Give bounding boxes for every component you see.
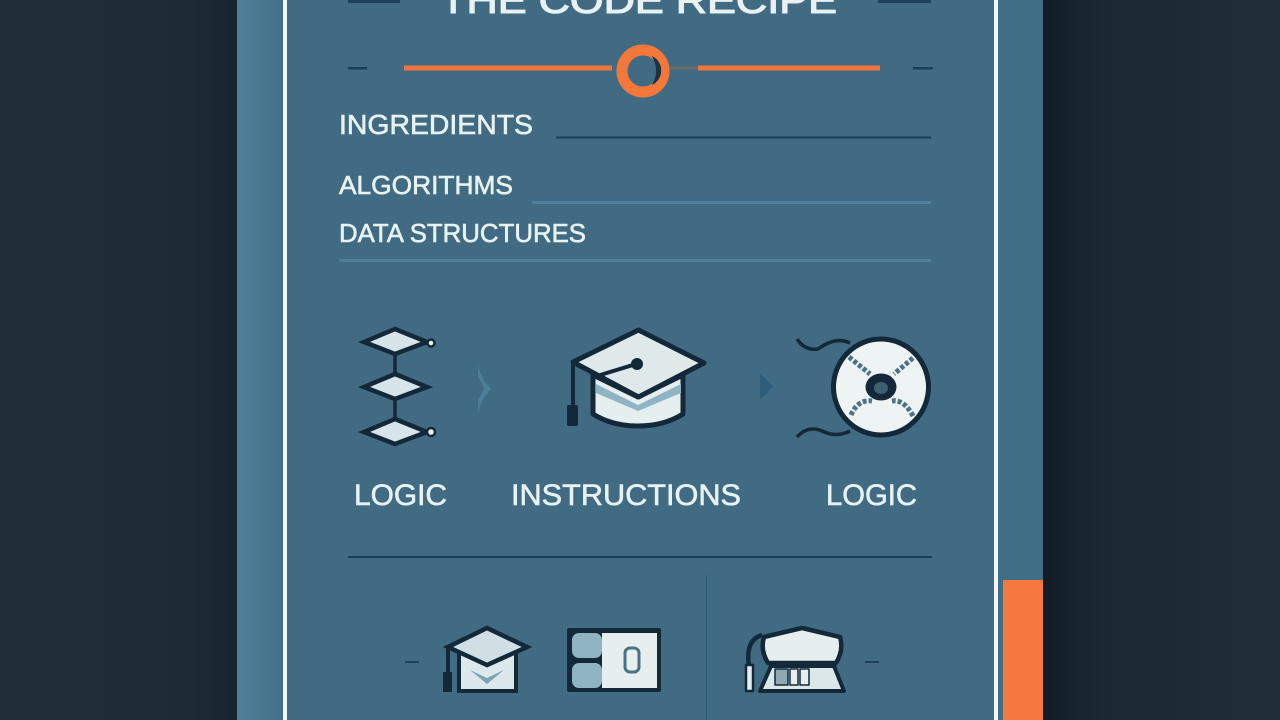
label: instructions: INSTRUCTIONS [511, 479, 741, 512]
dash: right [865, 661, 879, 663]
section divider [348, 556, 932, 558]
ingredient: data structures: DATA STRUCTURES [339, 218, 586, 248]
orange corner block [1003, 580, 1043, 720]
ingredient: algorithms [339, 170, 931, 204]
vertical divider [706, 575, 707, 720]
panel: recipe card [237, 0, 1043, 720]
icon: dome device [746, 628, 844, 691]
label: logic: LOGIC [354, 479, 447, 512]
label: logic: LOGIC [826, 479, 917, 512]
icon: graduation cap [567, 330, 704, 426]
ingredient: algorithms: ALGORITHMS [339, 170, 513, 200]
title [348, 0, 931, 21]
ingredients heading: INGREDIENTS [339, 109, 533, 140]
ingredient: data structures [339, 218, 931, 262]
icon: flowchart diamonds [364, 329, 435, 444]
arrow: solid triangle [760, 373, 773, 400]
icon: small graduation cap [443, 628, 527, 692]
icon: disc with chains and wires [797, 339, 928, 437]
dash: left [405, 661, 419, 663]
icon: storage box [567, 628, 661, 692]
orange divider with ring [348, 50, 933, 92]
arrow: faint chevron [478, 365, 492, 413]
